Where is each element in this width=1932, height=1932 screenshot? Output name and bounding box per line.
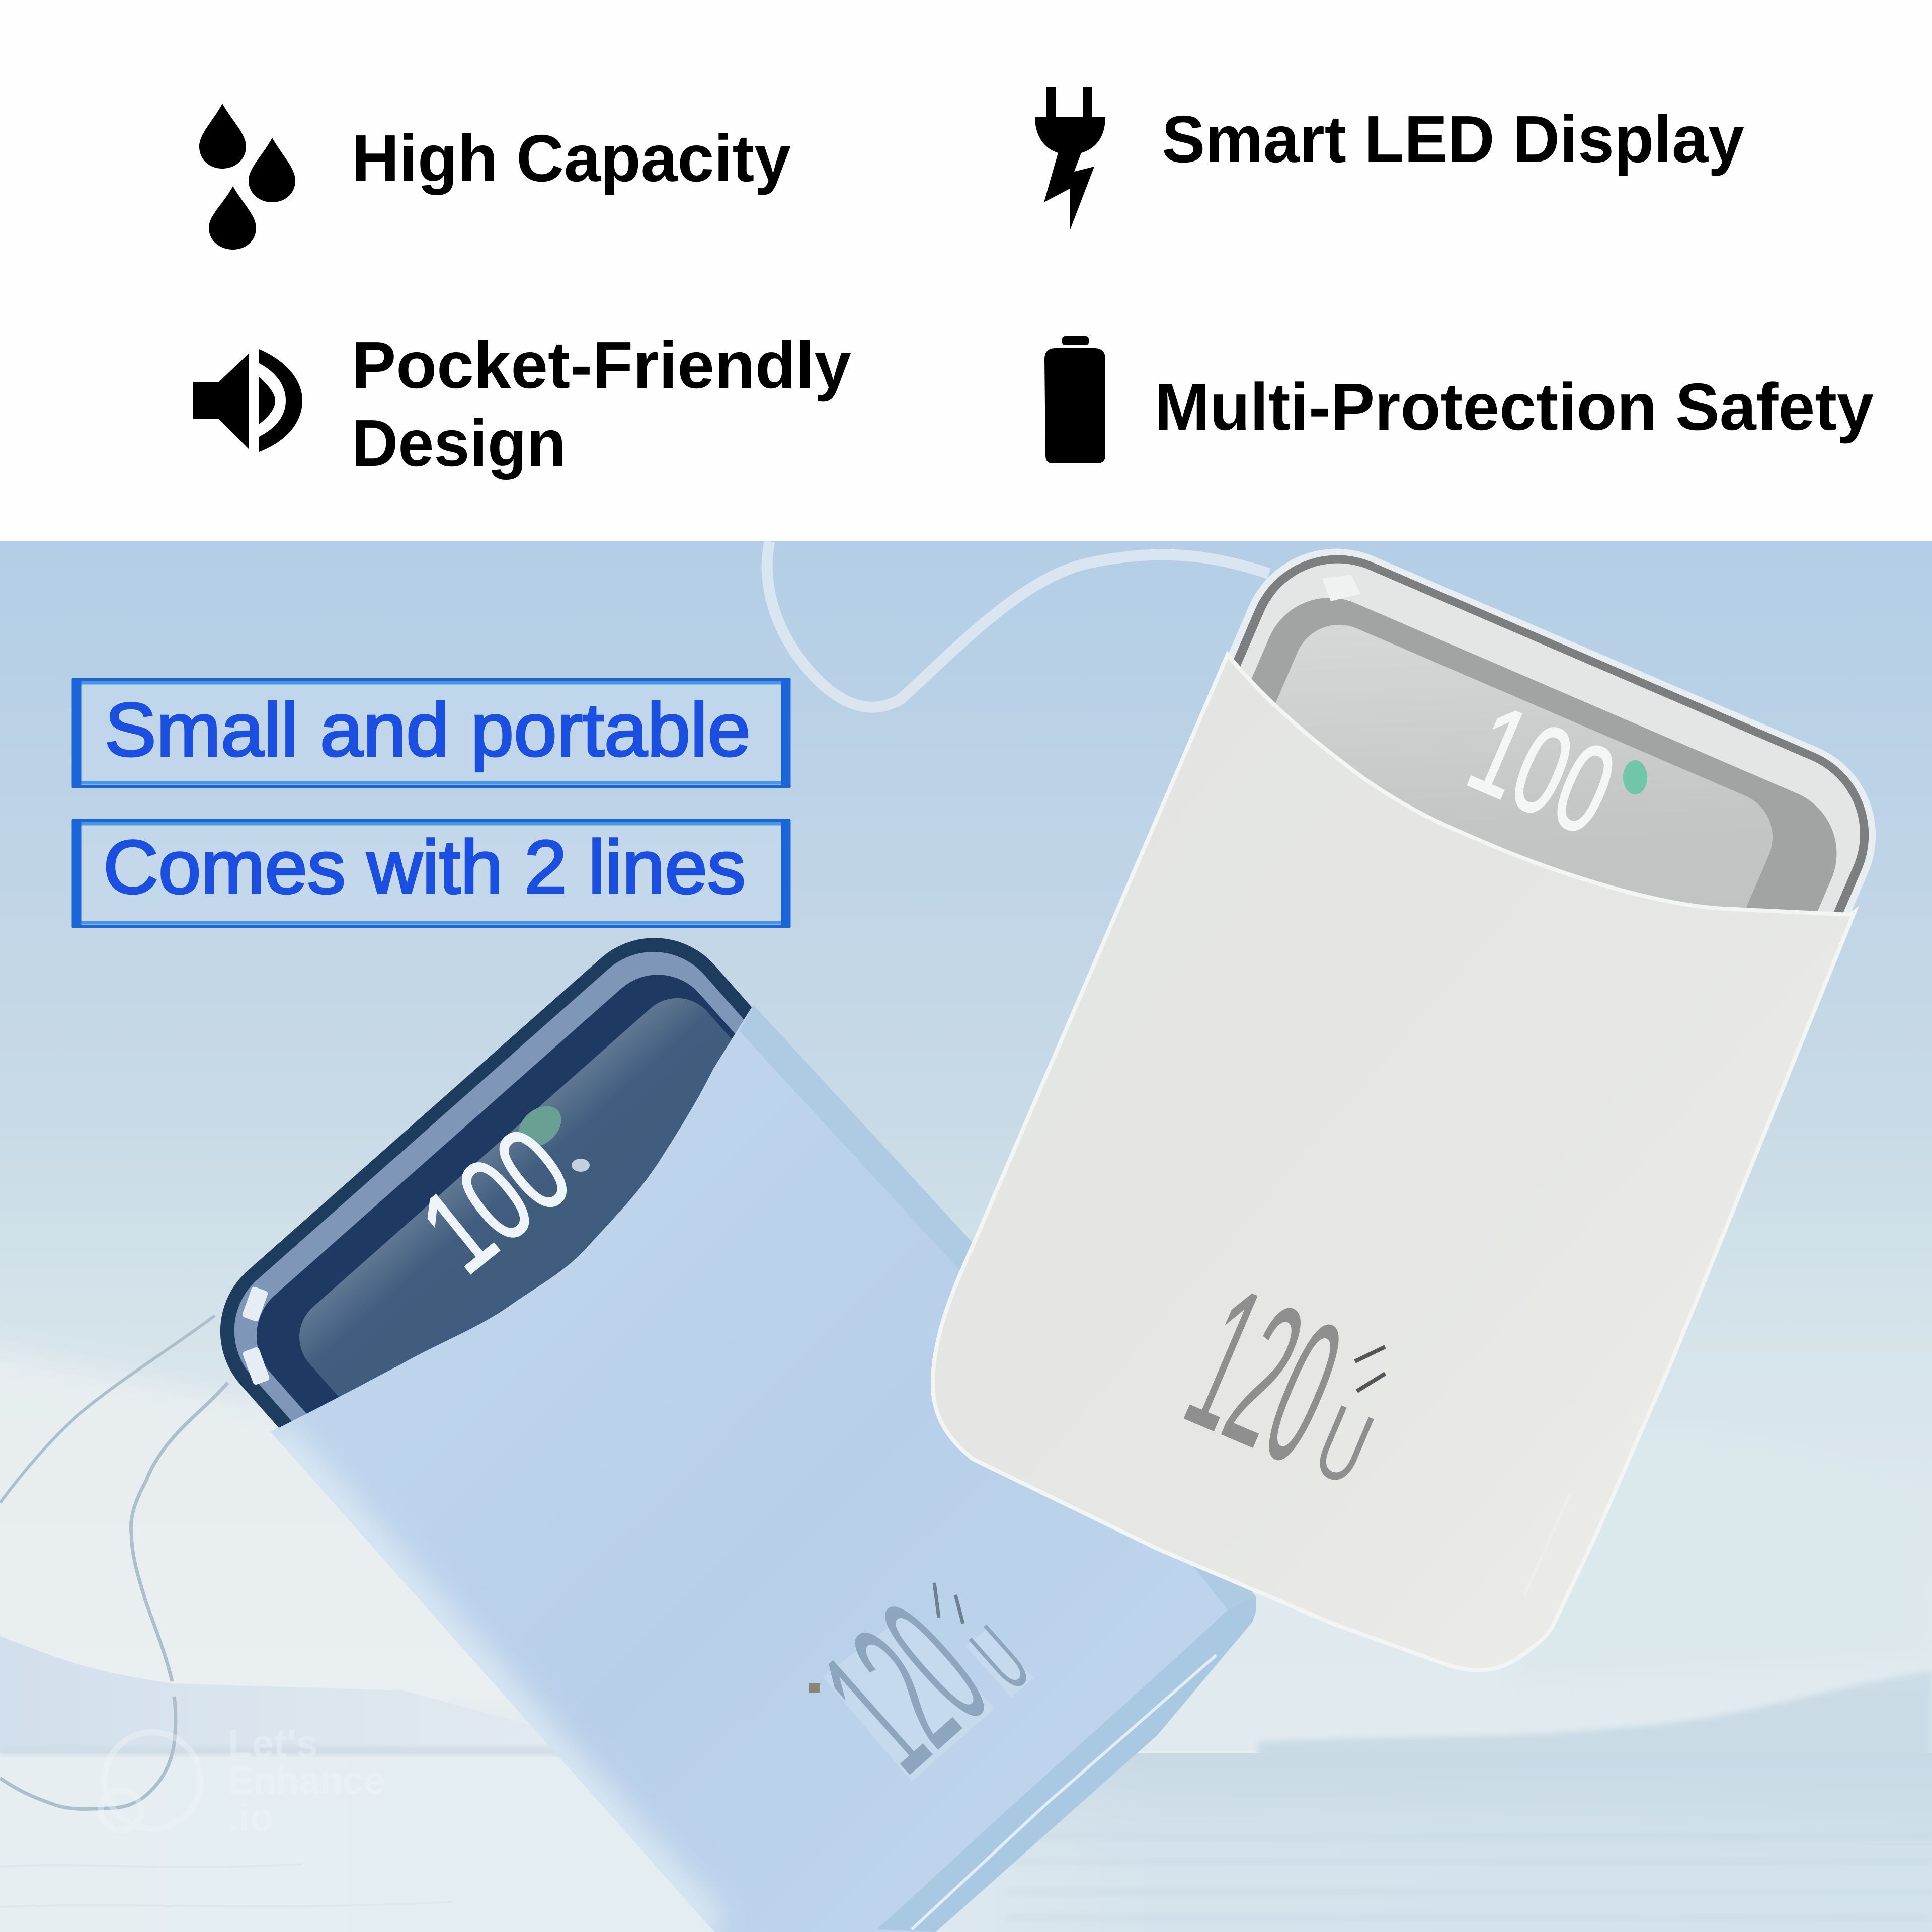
- power bank: white: [933, 519, 1906, 1670]
- feature: high capacity: [199, 104, 791, 250]
- blue product background: [0, 541, 1932, 1932]
- blue device sleeve: [252, 981, 1283, 1932]
- cable: white power bank: [767, 541, 1269, 707]
- blue device lower side band: [877, 1596, 1256, 1932]
- watermark: Enhance: [228, 1758, 385, 1802]
- callout: comes with 2 lines: Comes with 2 lines: [103, 825, 746, 909]
- feature: smart LED display: [1035, 87, 1744, 231]
- cables: blue power bank: [0, 1316, 228, 1809]
- watermark: Let's: [228, 1721, 318, 1765]
- callout: small and portable: Small and portable: [105, 687, 751, 772]
- heading: pocket-friendly design: [352, 328, 851, 480]
- white device chrome glint: [1322, 575, 1361, 601]
- feature: pocket-friendly design: [193, 328, 851, 480]
- heading: multi-protection safety: Multi-Protection Safety: [1155, 370, 1874, 444]
- watermark: [101, 1721, 385, 1839]
- watermark: .io: [228, 1795, 274, 1839]
- heading: pocket-friendly design: Design: [352, 406, 566, 480]
- heading: high capacity: High Capacity: [352, 121, 791, 195]
- white device chrome top: [1159, 519, 1906, 1081]
- power bank: blue: [187, 905, 1283, 1932]
- white device status light: [1623, 760, 1647, 794]
- blue device status light: [510, 1098, 570, 1155]
- feature: multi-protection safety: [1044, 336, 1874, 463]
- white feature panel: [0, 0, 1932, 541]
- icon: speaker: [193, 349, 302, 452]
- white device sleeve: [933, 655, 1855, 1670]
- callout: comes with 2 lines: [72, 820, 790, 927]
- blue device battery reading: 100: [397, 1102, 595, 1298]
- blue device 120 mark: 120: [786, 1565, 1023, 1810]
- blue device chrome top: [220, 938, 752, 1428]
- white device side highlight: [1524, 1494, 1570, 1595]
- icon: battery: [1044, 336, 1105, 463]
- icon: plug with bolt: [1035, 87, 1105, 231]
- blue device left edge glow: [271, 1432, 714, 1932]
- white device 120 mark: U: [1301, 1383, 1387, 1507]
- blue device dot: [572, 1159, 590, 1172]
- callout: small and portable: [72, 679, 790, 787]
- white device 120 mark: 120: [1161, 1244, 1369, 1506]
- blue device top right band: [740, 1005, 1256, 1610]
- blue device 120 mark: U: [952, 1607, 1049, 1710]
- heading: smart LED display: Smart LED Display: [1162, 102, 1744, 176]
- blue device side glints: [242, 1286, 270, 1386]
- icon: water drops: [199, 104, 295, 250]
- heading: pocket-friendly design: Pocket-Friendly: [352, 328, 851, 402]
- white device battery reading: 100: [1451, 678, 1634, 862]
- blue device side highlight: [912, 1655, 1216, 1929]
